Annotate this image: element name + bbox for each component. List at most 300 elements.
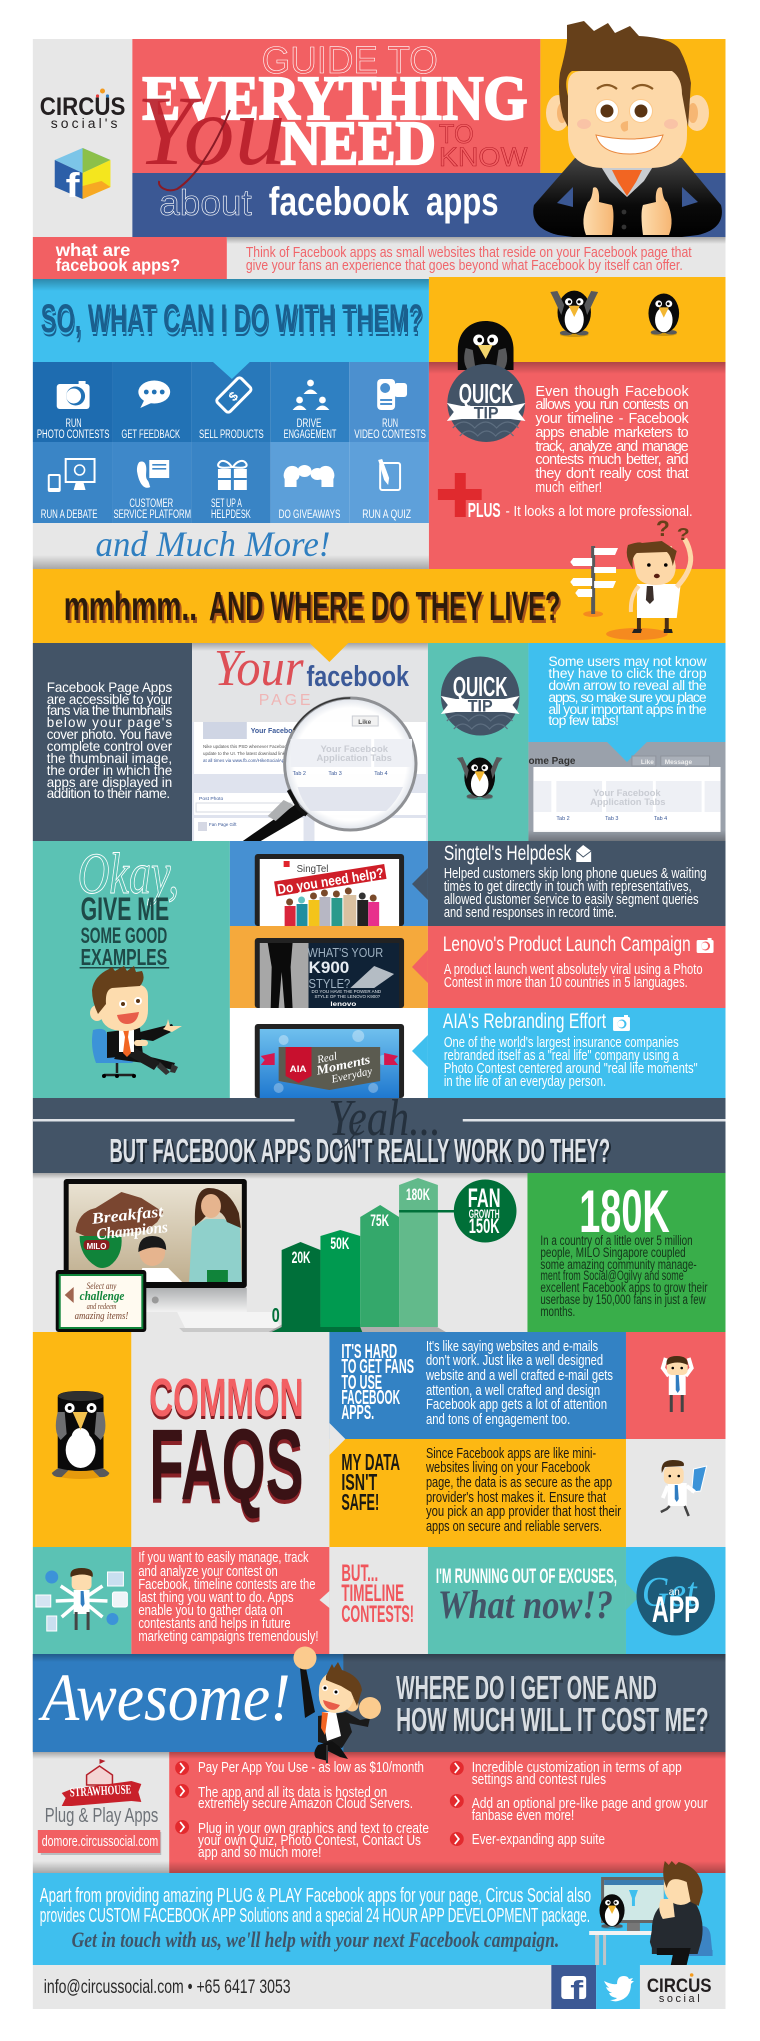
logo: strawhouse: STRAWHOUSE (69, 1781, 132, 1800)
heading: mmhmm and where do they live: mmhmm.. (64, 583, 197, 629)
feature list column 1 (198, 1759, 429, 1861)
text: drop down tip copy: they have to click the drop (548, 665, 707, 681)
magnifier: Like (358, 719, 372, 726)
text: milo copy (540, 1232, 708, 1319)
composer cards: Post Photo (199, 796, 224, 802)
heading: give me some good examples: SOME GOOD (81, 923, 167, 948)
icon: video camera (377, 379, 407, 410)
badge: get an app: APP (652, 1589, 700, 1630)
text: quick tip copy: contests much better, and (535, 452, 689, 468)
bar chart: fan growth: 50K (330, 1234, 350, 1253)
panel: page apps explanation (33, 643, 192, 841)
panel: milo case study (33, 1173, 527, 1332)
panel: plug and play features (169, 1752, 726, 1873)
text: drop down tip copy: apps, so make sure you place (548, 689, 707, 705)
text: timeline answer: enable you to gather data on (138, 1602, 283, 1619)
laptop: singtel: SingTel (297, 864, 328, 875)
heading: faqs (149, 1410, 304, 1525)
screenshot headline: Champions (96, 1219, 169, 1243)
text: lenovo body (444, 962, 703, 991)
laptop: lenovo: K900 (309, 958, 349, 977)
text: milo copy: In a country of a little over 5 million (540, 1232, 693, 1248)
bullets (175, 1761, 464, 1846)
heading: mmhmm and where do they live (64, 583, 562, 632)
grid labels: VIDEO CONTESTS (354, 427, 426, 441)
text: timeline answer (138, 1549, 318, 1645)
icon: phone with note (137, 460, 169, 488)
text: drop down tip copy: all your important apps in the (548, 701, 707, 717)
title: about facebook apps: facebook (269, 180, 410, 224)
text: definition: give your fans an experience that goes beyond what Facebook by itself can offer. (246, 258, 683, 274)
grid labels: SELL PRODUCTS (199, 427, 264, 441)
panel: timeline answer (131, 1547, 329, 1654)
question (341, 1341, 414, 1424)
grid labels (37, 416, 426, 521)
icon: big penguin (458, 321, 514, 370)
tablet with challenge: challenge (80, 1288, 125, 1303)
icon: gift (218, 461, 247, 490)
title: to know: TO (439, 119, 474, 149)
bar chart: fan growth: 0 (272, 1305, 280, 1327)
text: milo copy: ment from Social@Ogilvy and some (540, 1267, 684, 1283)
illustration: thumbs up businessman (533, 21, 722, 237)
question: my data (341, 1449, 400, 1515)
tabs screenshot: ome Page (528, 756, 576, 767)
feature list column 1: your own Quiz, Photo Contest, Contact Us (198, 1832, 421, 1849)
text: page apps copy: apps are displayed in (47, 775, 172, 790)
panel: but timeline contests (329, 1547, 428, 1654)
grid labels: RUN A DEBATE (41, 507, 98, 521)
panel: header logo column (33, 39, 132, 237)
heading: mmhmm and where do they live: mmhmm.. (66, 586, 199, 632)
screenshot headline: Breakfast (90, 1203, 165, 1228)
heading: singtel: Singtel's Helpdesk (444, 842, 572, 865)
answer: and tons of engagement too. (426, 1411, 570, 1428)
icon: facebook (551, 1965, 596, 2009)
laptop: lenovo: STYLE OF THE LENOVO K900? (314, 994, 381, 999)
icon: speech bubble (138, 380, 170, 408)
icon: quiz tablet (378, 459, 400, 490)
logo: circus social: CIRCUS (647, 1976, 712, 1997)
logo: circus social (647, 1973, 712, 2005)
text: okay: Okay, (78, 841, 179, 906)
text: aia body: Photo Contest centered around "real life moments" (444, 1061, 698, 1077)
tabs screenshot: Your Facebook (593, 788, 661, 799)
panel: faq penguin (33, 1332, 131, 1547)
icon: twitter (596, 1965, 640, 2009)
panel: your facebook page mockup (192, 640, 428, 841)
illustration: man with many arms (36, 1568, 127, 1631)
badge: quick tip (441, 656, 519, 736)
text: timeline answer: If you want to easily manage, track (138, 1549, 309, 1566)
panel: drop down tip (528, 643, 726, 841)
heading: where do i get one (396, 1669, 711, 1741)
text: and much more: and Much More! (96, 524, 330, 564)
badge: get an app (636, 1556, 715, 1636)
text: definition: Think of Facebook apps as small websites that reside on your Facebook page that (246, 245, 692, 261)
laptop: aia (255, 1024, 404, 1098)
magnifier: Tab 2 (293, 771, 306, 777)
feature list column 1: extremely secure Amazon Cloud Servers. (198, 1795, 413, 1812)
text: timeline answer: marketing campaigns tremendously! (138, 1628, 318, 1645)
heading: but timeline contests: BUT... (341, 1560, 378, 1587)
grid labels: SET UP A (211, 496, 242, 510)
heading: common (149, 1368, 304, 1431)
feature list column 2 (472, 1759, 708, 1848)
icon: facebook app cube: f (66, 167, 80, 205)
panel: teal man with icons (33, 1547, 131, 1654)
text: page apps copy: cover photo. You have (47, 727, 172, 742)
icon: penguin arms up (457, 757, 503, 800)
badge: quick tip: TIP (474, 403, 499, 423)
heading: what are facebook apps (55, 240, 180, 275)
panel: what now (428, 1547, 626, 1654)
title: guide to: GUIDE TO (262, 40, 438, 82)
text: your: Your (214, 640, 304, 697)
feature list column 1: Pay Per App You Use - as low as $10/month (198, 1759, 424, 1776)
cover card (194, 722, 426, 774)
title: need: NEED (281, 110, 436, 178)
panel: common faqs heading (131, 1332, 329, 1547)
monitor with milo screenshot: MILO (87, 1242, 106, 1251)
question: my data: ISN'T (341, 1469, 377, 1495)
text: quick tip copy: track, analyze and manage (535, 439, 689, 455)
text: get in touch: Get in touch with us, we'll help with your next Facebook campaign. (72, 1927, 559, 1952)
icon: plus cross (438, 473, 482, 517)
icon: envelope (576, 845, 591, 862)
panel: what are facebook apps (33, 237, 726, 279)
icon: question marks: ? (656, 516, 670, 541)
text: page apps copy: the order in which the (47, 763, 172, 778)
panel: custom apps (33, 1861, 726, 1965)
icon: facebook: f (570, 1977, 584, 2005)
cover card: at all times via www.fb.com/HikeSocialApps (203, 758, 290, 763)
answer: my data: websites living on your Facebook (425, 1459, 591, 1476)
laptop: lenovo: STYLE? (309, 976, 350, 991)
question: IT'S HARD (341, 1341, 397, 1363)
laptop: lenovo: DO YOU HAVE THE POWER AND (311, 989, 382, 994)
laptop: lenovo (255, 938, 404, 1008)
tabs screenshot: Tab 3 (605, 816, 618, 822)
question: my data: MY DATA (341, 1449, 400, 1475)
icon: chat heads (284, 465, 334, 487)
grid labels: RUN (66, 416, 82, 430)
composer cards (194, 793, 426, 841)
screenshot headline (90, 1203, 169, 1244)
panel: singtel screenshot (230, 841, 428, 926)
panel: title (132, 39, 726, 237)
footer (33, 1965, 726, 2009)
button: domore (38, 1830, 161, 1855)
magnifier (243, 698, 416, 841)
panel: singtel helpdesk (412, 841, 726, 926)
panel: awesome banner (33, 1654, 726, 1752)
heading: give me some good examples: GIVE ME (81, 891, 169, 927)
heading: what are facebook apps: what are (55, 240, 130, 260)
tabs screenshot: Tab 2 (556, 816, 570, 822)
panel: yeah banner (33, 1090, 726, 1173)
text: aia body (444, 1035, 698, 1090)
monitor with milo screenshot (64, 1179, 247, 1288)
heading: running out of excuses: I'M RUNNING OUT OF EXCUSES, (436, 1565, 617, 1588)
answer: website and a well crafted e-mail gets (425, 1367, 613, 1384)
tabs screenshot: Message (665, 759, 692, 766)
logo: circus social: social (659, 1993, 700, 2005)
heading: so what can i do with them: SO, WHAT CAN I DO WITH THEM? (42, 301, 424, 345)
text: quick tip copy: much either! (535, 480, 602, 496)
answer: Facebook app gets a lot of attention (426, 1396, 607, 1413)
badge: quick tip: TIP (468, 696, 493, 716)
icon: engagement people (293, 380, 329, 410)
tablet with challenge (56, 1270, 146, 1332)
grid labels: ENGAGEMENT (284, 427, 337, 441)
grid labels: GET FEEDBACK (121, 427, 180, 441)
text: quick tip copy: your timeline - Facebook (535, 411, 689, 427)
text: page apps copy: Facebook Page Apps (47, 680, 172, 695)
logo: strawhouse (62, 1759, 141, 1806)
panel: faq hard to get fans (329, 1332, 626, 1547)
text: drop down tip copy (548, 653, 708, 728)
text: page: PAGE (259, 692, 311, 709)
heading: common: COMMON (149, 1371, 304, 1431)
tablet with challenge: amazing items! (75, 1311, 128, 1322)
feature list column 2: settings and contest rules (472, 1771, 606, 1788)
title: everything: EVERYTHING (142, 65, 527, 133)
grid labels: PHOTO CONTESTS (37, 427, 109, 441)
title: to know (439, 119, 528, 172)
text: timeline answer: contestants and helps in future (138, 1615, 291, 1632)
stat: 180K: 180K (579, 1178, 670, 1245)
icon: penguin (648, 293, 679, 336)
panel: aia screenshot (230, 1008, 428, 1098)
text: facebook: facebook (307, 661, 410, 693)
answer: my data: apps on secure and reliable servers. (426, 1518, 602, 1535)
feature list column 1: Plug in your own graphics and text to create (198, 1820, 429, 1837)
text: milo copy: months. (540, 1303, 575, 1319)
feature list column 2: Incredible customization in terms of app (472, 1759, 682, 1776)
cover card: update to the UI. The latest download link is accessible (203, 751, 312, 756)
panel: quick tip red (429, 321, 726, 569)
feature list column 2: fanbase even more! (472, 1807, 574, 1824)
text: contact: info@circussocial.com • +65 6417 3053 (44, 1977, 291, 1998)
heading: what now: What now!? (438, 1582, 613, 1627)
badge: quick tip: QUICK (453, 671, 508, 702)
text: page apps copy: are accessible to your (47, 692, 173, 707)
answer: my data: you pick an app provider that host their (426, 1503, 621, 1520)
script: awesome: Awesome! (38, 1660, 291, 1735)
tabs screenshot: Tab 4 (654, 816, 667, 822)
laptop: aia: Moments (314, 1051, 371, 1078)
icon: facebook app cube (55, 148, 110, 205)
laptop: singtel (255, 854, 404, 926)
triangle pointer (310, 643, 348, 662)
panel: good examples heading (33, 841, 230, 1098)
icon: question marks: ? (677, 524, 690, 544)
magnifier: Tab 4 (374, 771, 388, 777)
question: FACEBOOK (341, 1387, 400, 1409)
answer: my data (425, 1445, 621, 1535)
illustration: confused man with signpost (570, 516, 691, 640)
text: milo copy: some amazing community manage- (540, 1256, 697, 1272)
title: to know: KNOW (439, 142, 528, 172)
illustration: man at desk with penguin (589, 1861, 713, 1965)
icon: camera (697, 938, 714, 953)
grid labels: RUN A QUIZ (362, 507, 411, 521)
grid labels: DO GIVEAWAYS (279, 507, 340, 521)
heading: so what can i do with them: SO, WHAT CAN I DO WITH THEM? (41, 299, 423, 343)
answer: attention, a well crafted and design (426, 1382, 600, 1399)
grid labels: RUN (382, 416, 398, 430)
heading: but timeline contests (341, 1560, 414, 1628)
bar chart: fan growth (269, 1178, 455, 1332)
text: quick tip copy (535, 384, 689, 496)
text: plus: - It looks a lot more professional. (506, 503, 693, 520)
answer: my data: Since Facebook apps are like mini- (426, 1445, 596, 1462)
laptop: aia: Everyday (329, 1065, 373, 1086)
panel: lenovo screenshot (230, 926, 428, 1008)
panel: aia rebranding (412, 1008, 726, 1098)
logo: Circus Social: CIRCUS (40, 93, 125, 121)
answer: my data: page, the data is as secure as the app (426, 1474, 612, 1491)
composer cards: Fan Page Gift (209, 822, 237, 827)
badge: get an app: an (669, 1587, 680, 1598)
icon: block penguin (52, 1391, 109, 1479)
text: page apps copy (47, 680, 173, 801)
grid: things you can do (33, 362, 429, 523)
grid labels: DRIVE (297, 416, 321, 430)
title: you: You (136, 75, 286, 186)
bar chart: fan growth: 20K (292, 1248, 311, 1267)
laptop: aia: AIA (290, 1064, 307, 1074)
heading: what are facebook apps: facebook apps? (56, 255, 180, 275)
text: aia body: One of the world's largest insurance companies (444, 1035, 679, 1051)
badge: fan growth: 150K (469, 1215, 500, 1238)
laptop: lenovo: lenovo (330, 1002, 357, 1008)
text: page apps copy: the thumbnail image, (47, 751, 172, 766)
answer: my data: provider's host makes it. Ensure that (426, 1489, 607, 1506)
badge: fan growth: FAN (468, 1183, 501, 1213)
text: drop down tip copy: top few tabs! (548, 712, 619, 728)
tabs screenshot: Like (641, 759, 654, 766)
tablet with challenge: Select any (87, 1281, 116, 1291)
tablet with challenge: and redeem (87, 1302, 117, 1311)
title: about facebook apps: about (159, 182, 252, 223)
panel: strawhouse (33, 1752, 176, 1873)
text: singtel body: times to get directly in touch with representatives, (444, 879, 692, 895)
text: singtel body (444, 866, 707, 921)
tabs screenshot: Application Tabs (590, 797, 666, 808)
cover card: Your Facebook (251, 728, 301, 735)
text: page apps copy: complete control over (47, 739, 173, 754)
laptop: lenovo: WHAT'S YOUR (308, 945, 383, 960)
heading: faqs: FAQS (149, 1410, 304, 1521)
icon: question marks (656, 516, 690, 544)
text: custom apps copy (40, 1885, 591, 1927)
panel: get an app (626, 1547, 726, 1654)
panel: running man (626, 1439, 726, 1547)
illustration: stressed man (663, 1356, 692, 1412)
grid labels: SERVICE PLATFORM (113, 507, 191, 521)
heading: aia: AIA's Rebranding Effort (443, 1010, 606, 1033)
question: TO GET FANS (341, 1356, 414, 1378)
bar chart: fan growth: 75K (370, 1211, 390, 1230)
panel: and much more (33, 523, 429, 569)
panel: so what can I do (33, 279, 429, 362)
text: page apps copy: addition to their name. (47, 786, 170, 801)
text: quick tip copy: allows you run contests on (535, 397, 689, 413)
icon: camera (57, 381, 90, 409)
answer (425, 1338, 613, 1428)
title: about facebook apps: apps (426, 180, 499, 224)
text: page apps copy: fans via the thumbnails (47, 703, 172, 718)
cover card: Nike updates this PSD whenever Facebook performs an (203, 744, 315, 749)
heading: so what can i do with them (41, 297, 424, 345)
text: singtel body: and send responses in record time. (444, 905, 617, 921)
icon: ticket: $ (225, 388, 242, 404)
feature list column 1: The app and all its data is hosted on (198, 1784, 387, 1801)
question: my data: SAFE! (341, 1489, 379, 1515)
text: aia body: in the life of an everyday person. (444, 1074, 606, 1090)
badge: get an app: Get (642, 1570, 698, 1616)
text: quick tip copy: Even though Facebook (535, 384, 689, 400)
illustration: man with tablet (661, 1460, 707, 1516)
text: timeline answer: Facebook, timeline contests are the (138, 1576, 315, 1593)
text: timeline answer: and analyze your contest on (138, 1563, 278, 1580)
magnifier: Your Facebook (320, 744, 389, 755)
icon: penguin arms up (550, 291, 598, 337)
text: milo copy: people, MILO Singapore coupled (540, 1244, 686, 1260)
magnifier: Application Tabs (316, 753, 392, 764)
laptop: aia: Real (315, 1050, 338, 1066)
text: plus: PLUS (468, 500, 501, 522)
badge: fan growth (454, 1180, 517, 1242)
feature list column 2: Add an optional pre-like page and grow your (472, 1795, 708, 1812)
icon: ticket (216, 377, 252, 413)
panel: where do they live (33, 569, 726, 643)
text: page apps copy: below your page's (47, 715, 172, 730)
grid labels: CUSTOMER (129, 496, 173, 510)
grid labels: HELPDESK (211, 507, 251, 521)
text: plug and play apps: Plug & Play Apps (45, 1805, 158, 1827)
laptop: singtel: Do you need help? (276, 864, 385, 897)
icon: debate monitor (48, 458, 96, 492)
text: drop down tip copy: down arrow to reveal all the (548, 677, 707, 693)
bar chart: fan growth: 180K (406, 1185, 430, 1204)
badge: fan growth: GROWTH (469, 1207, 500, 1221)
heading: so what can i do with them: SO, WHAT CAN I DO WITH THEM? (41, 297, 423, 341)
heading: but timeline contests: TIMELINE (341, 1580, 404, 1607)
feature list column 2: Ever-expanding app suite (472, 1831, 605, 1848)
question: TO USE (341, 1372, 382, 1394)
feature list column 1: app and so much more! (198, 1844, 321, 1861)
heading: faqs: FAQS (149, 1414, 304, 1525)
panel: lenovo campaign (412, 926, 726, 1008)
script: yeah: Yeah... (328, 1090, 441, 1147)
logo: Circus Social: social's (51, 115, 117, 131)
panel: stressed man (626, 1332, 726, 1439)
answer: It's like saying websites and e-mails (426, 1338, 598, 1355)
text: timeline answer: last thing you want to do. Apps (138, 1589, 294, 1606)
illustration: man on office chair (90, 966, 182, 1078)
badge: quick tip (447, 364, 525, 442)
answer: don't work. Just like a well designed (426, 1352, 603, 1369)
title: about facebook apps (159, 180, 499, 224)
question: APPS. (341, 1402, 374, 1424)
tabs screenshot (528, 742, 726, 841)
heading: common: COMMON (149, 1368, 304, 1428)
panel: milo stat (527, 1173, 726, 1332)
icon: camera (613, 1015, 630, 1031)
